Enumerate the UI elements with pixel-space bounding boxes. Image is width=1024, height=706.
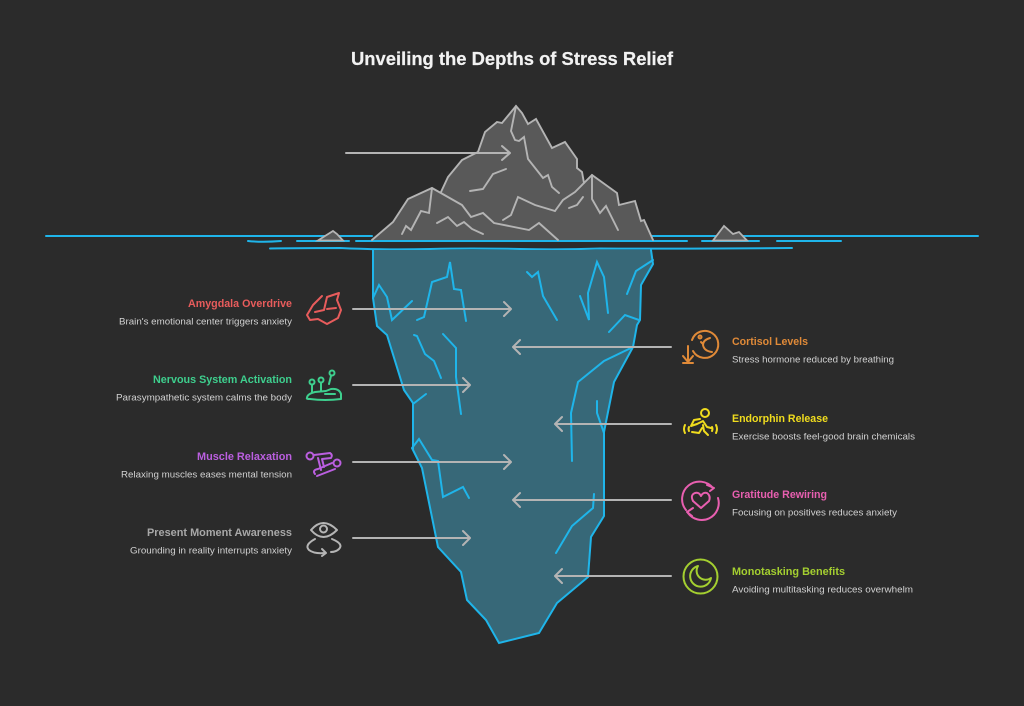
item: Muscle Relaxation: Relaxing muscles eases mental tension xyxy=(121,470,292,480)
item: Amygdala Overdrive xyxy=(119,293,341,328)
icon: reclining figure xyxy=(306,452,340,476)
arrow: present moment xyxy=(353,531,470,545)
item: Gratitude Rewiring: Gratitude Rewiring xyxy=(732,489,827,501)
arrow: muscle xyxy=(353,455,511,469)
arrow: tip of iceberg xyxy=(346,146,510,160)
item: Amygdala Overdrive: Brain's emotional center triggers anxiety xyxy=(119,316,292,328)
icon: brain xyxy=(307,293,341,324)
arrow: amygdala xyxy=(353,302,511,316)
item: Nervous System Activation xyxy=(116,370,341,404)
arrow: cortisol xyxy=(513,340,671,354)
icon: nervous system xyxy=(307,370,341,400)
item: Endorphin Release: Exercise boosts feel-good brain chemicals xyxy=(732,432,915,442)
icon: heart with cycle arrows xyxy=(682,482,719,520)
item: Nervous System Activation: Parasympathetic system calms the body xyxy=(116,392,292,404)
item: Present Moment Awareness xyxy=(130,523,340,556)
item: Monotasking Benefits: Avoiding multitasking reduces overwhelm xyxy=(732,584,913,596)
arrow: endorphin xyxy=(555,417,671,431)
arrow: nervous system xyxy=(353,378,470,392)
small islet: right xyxy=(713,226,747,240)
iceberg below water xyxy=(373,250,653,643)
item: Gratitude Rewiring xyxy=(682,482,897,520)
icon: moon in circle xyxy=(684,560,718,594)
item: Cortisol Levels: Stress hormone reduced by breathing xyxy=(732,354,894,366)
item: Muscle Relaxation: Muscle Relaxation xyxy=(197,451,292,463)
arrow: monotasking xyxy=(555,569,671,583)
arrow: gratitude xyxy=(513,493,671,507)
icon: cortisol circle with down arrow xyxy=(683,331,718,363)
iceberg above water xyxy=(372,106,653,240)
small islet: left xyxy=(318,231,343,240)
item: Nervous System Activation: Nervous System Activation xyxy=(153,374,292,386)
item: Muscle Relaxation xyxy=(121,451,340,480)
item: Endorphin Release: Endorphin Release xyxy=(732,413,828,425)
icon: runner xyxy=(684,409,717,435)
title: Unveiling the Depths of Stress Relief xyxy=(351,49,674,69)
item: Endorphin Release xyxy=(684,409,915,442)
item: Cortisol Levels: Cortisol Levels xyxy=(732,336,808,348)
item: Amygdala Overdrive: Amygdala Overdrive xyxy=(188,298,292,310)
icon: eye with cycle xyxy=(307,523,340,556)
item: Present Moment Awareness: Grounding in reality interrupts anxiety xyxy=(130,546,292,556)
item: Monotasking Benefits xyxy=(684,560,913,596)
item: Cortisol Levels xyxy=(683,331,894,366)
item: Gratitude Rewiring: Focusing on positives reduces anxiety xyxy=(732,508,897,518)
item: Monotasking Benefits: Monotasking Benefits xyxy=(732,566,845,578)
water surface lines xyxy=(46,236,978,249)
item: Present Moment Awareness: Present Moment Awareness xyxy=(147,527,292,539)
